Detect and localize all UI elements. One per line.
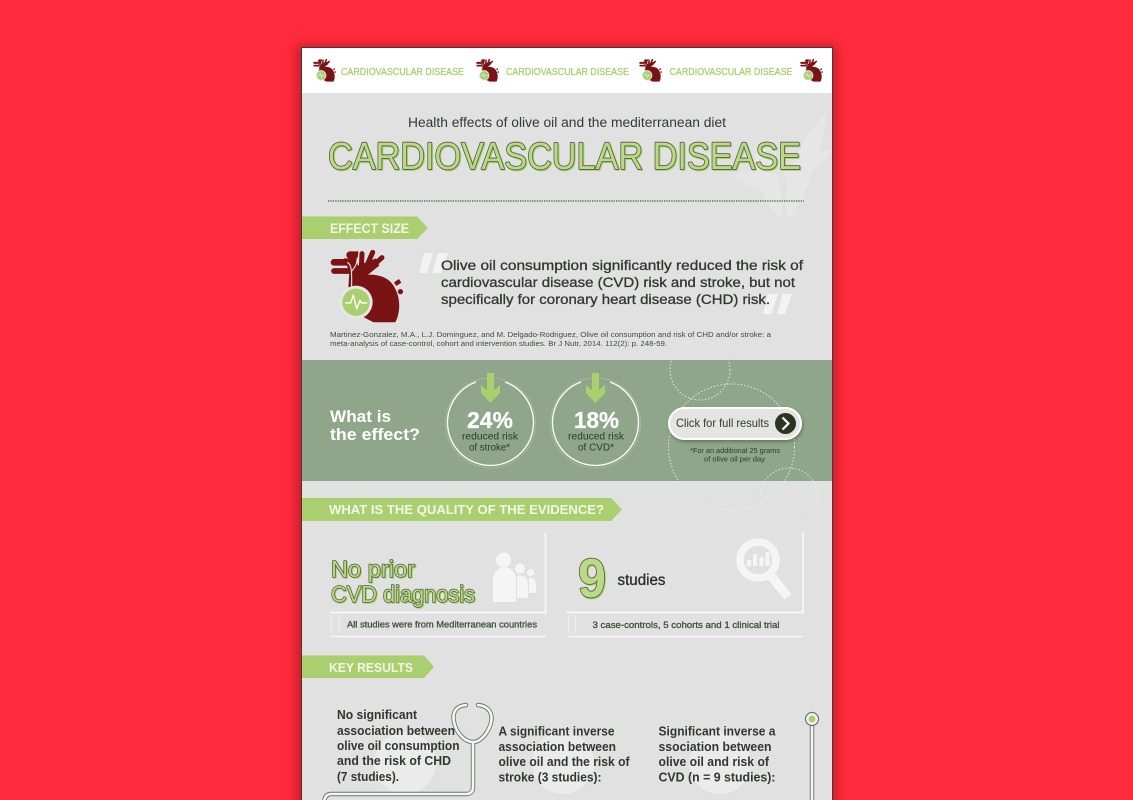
effect heading [330,408,420,444]
note: All studies were from Mediterranean countries [347,620,537,630]
title: CARDIOVASCULAR DISEASE [328,136,801,178]
icon: people [493,552,536,602]
effect heading: the effect? [330,426,420,444]
stat: 18% CVD [550,373,640,468]
result 2 text: A significant inverse [498,724,615,738]
quote text [441,258,803,307]
quote text: cardiovascular disease (CVD) risk and stroke, but not [441,275,795,290]
result 1 text: and the risk of CHD [337,754,451,768]
result 2 text: association between [498,740,616,754]
result 1 text: No significant [337,708,418,722]
banner: effect size: EFFECT SIZE [330,221,409,236]
stethoscope [324,705,492,800]
stat: 18% CVD: of CVD* [578,442,614,454]
icon: heart with pulse [334,252,403,322]
panel: no prior diagnosis [330,533,546,636]
citation: meta-analysis of case-control, cohort and intervention studies. Br J Nutr, 2014. 112(2): p. 248-59. [330,339,667,348]
subtitle: Health effects of olive oil and the mediterranean diet [408,115,726,130]
footnote [690,448,781,464]
icon: heart 4 [801,60,823,82]
result 2 text: olive oil and the risk of [498,755,630,769]
result 1 text: association between [337,724,455,738]
infographic panel [301,47,833,800]
panel shadow [297,46,836,800]
result 3 text: CVD (n = 9 studies): [658,770,776,784]
icon: heart 3 [640,60,662,82]
strip label 2: CARDIOVASCULAR DISEASE [506,67,629,78]
studies label: studies [618,572,666,589]
banner: key results [302,656,434,678]
heading [331,556,475,607]
icon: heart 1 [314,60,336,82]
result backdrop circles [374,732,751,794]
heading: CVD diagnosis [331,581,475,607]
timeline pin [806,712,818,800]
quote marks [419,253,792,314]
heading: No prior [331,556,415,582]
result 3 text: Significant inverse a [658,724,777,738]
icon: heart 2 [477,60,499,82]
stat: 18% CVD: reduced risk [568,430,625,442]
result 2 text: stroke (3 studies): [498,770,602,784]
stat: 24% stroke: of stroke* [469,442,510,454]
strip label 3: CARDIOVASCULAR DISEASE [670,67,793,78]
result 3 text: ssociation between [658,740,772,754]
banner: effect size [302,216,428,239]
stat: 24% stroke [446,373,536,468]
arrow down [586,373,605,403]
note: 3 case-controls, 5 cohorts and 1 clinical trial [592,620,780,630]
button: full results: Click for full results [676,416,769,430]
icon: magnifier [740,542,788,597]
banner: key results: KEY RESULTS [329,660,413,675]
quote text: Olive oil consumption significantly reduced the risk of [441,258,803,273]
citation: Martinez-Gonzalez, M.A., L.J. Dominguez, and M. Delgado-Rodriguez, Olive oil consumption and risk of CHD and/or stroke: a [330,330,772,339]
banner: quality of evidence [302,498,622,521]
result 3 text: olive oil and risk of [658,755,770,769]
big number: 9 [578,547,606,609]
result 1 text [337,708,460,784]
result 3 text [658,724,777,784]
result 1 text: (7 studies). [337,770,399,784]
result 2 text [498,724,630,784]
result 1 text: olive oil consumption [337,739,460,753]
icon: chevron [775,413,796,434]
quote text: specifically for coronary heart disease (CHD) risk. [441,292,770,307]
effect heading: What is [330,408,391,426]
citation [330,330,772,348]
stat: 18% CVD: 18% [574,407,619,433]
panel: nine studies [566,533,803,636]
stat: 24% stroke: reduced risk [462,430,519,442]
header strip [302,48,832,93]
panel: what is the effect [302,360,832,481]
banner: quality of evidence: WHAT IS THE QUALITY OF THE EVIDENCE? [329,502,604,517]
decorative olive leaves [732,112,832,216]
dotted circles [668,340,818,526]
footnote: *For an additional 25 grams [690,448,781,455]
button: full results [669,408,801,439]
footnote: of olive oil per day [704,456,766,464]
arrow down [481,373,500,403]
stat: 24% stroke: 24% [467,407,513,433]
strip label 1: CARDIOVASCULAR DISEASE [341,67,464,78]
